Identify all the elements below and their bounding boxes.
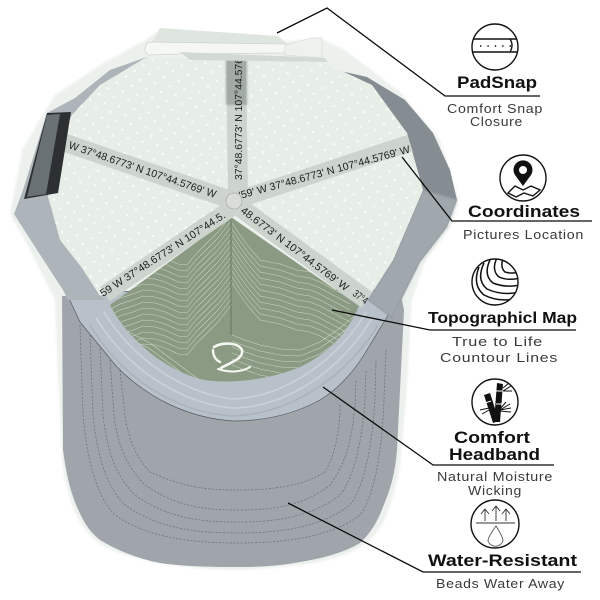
icon: map pin	[500, 155, 546, 201]
sweatband: right side	[323, 67, 457, 318]
crown panels mesh	[48, 58, 423, 298]
leader line: Comfort Headband	[323, 387, 554, 465]
heading: Topographicl Map: Topographicl Map	[428, 310, 577, 327]
icon: contour lines	[472, 258, 520, 305]
heading: Comfort Headband	[449, 429, 540, 464]
leader line: Topographic Map	[332, 310, 576, 330]
heading: PadSnap: PadSnap	[457, 73, 537, 92]
text: True to Life Countour Lines: True to Life	[452, 335, 543, 349]
centre button	[226, 193, 242, 209]
text: True to Life Countour Lines	[440, 335, 558, 365]
leader line: Coordinates	[402, 157, 592, 221]
sweatband: front	[66, 290, 395, 421]
cap illustration	[10, 28, 459, 570]
heading: Comfort Headband: Comfort	[454, 429, 531, 447]
text: Natural Moisture Wicking: Natural Moisture	[437, 470, 553, 484]
seam tapes	[60, 60, 410, 300]
text: Beads Water Away: Beads Water Away	[436, 577, 565, 591]
text: Natural Moisture Wicking: Wicking	[468, 484, 522, 498]
heading: Coordinates: Coordinates	[468, 203, 580, 221]
snap strap	[145, 28, 328, 62]
cap outer silhouette	[10, 30, 459, 570]
feature: Water-Resistant	[428, 500, 577, 591]
text: Comfort Snap Closure: Comfort Snap	[447, 102, 543, 116]
size label tag	[24, 112, 71, 199]
feature: Comfort Headband	[437, 379, 553, 498]
tape coordinate text	[67, 58, 412, 307]
feature: Topographic Map	[428, 258, 577, 365]
tape coordinate text: 37°48.6773' N 107°44.576	[233, 58, 245, 180]
dark tape shading	[226, 60, 247, 105]
icon: strap	[472, 24, 518, 70]
tape coordinate text: 48.6773' N 107°44.5769' W	[238, 205, 351, 294]
tape coordinate text: W 37°48.6773' N 107°44.5769' W	[67, 139, 218, 201]
brim stitching	[80, 325, 386, 543]
tape coordinate text: '59' W 37°48.6773' N 107°44.5769' W	[238, 144, 412, 202]
text: True to Life Countour Lines: Countour Lines	[440, 351, 558, 365]
text: Pictures Location: Pictures Location	[463, 228, 584, 242]
logo mark	[213, 344, 250, 371]
tape coordinate text: 59 W 37°48.6773' N 107°44.5.	[98, 209, 228, 300]
feature: Coordinates	[463, 155, 584, 242]
leader line: PadSnap	[277, 8, 540, 96]
icon: water drop with arrows	[471, 500, 519, 548]
green topographic panel	[110, 218, 359, 382]
text: Comfort Snap Closure: Closure	[470, 115, 523, 129]
sweatband: left side	[14, 57, 147, 300]
heading: Water-Resistant: Water-Resistant	[428, 551, 577, 570]
tape coordinate text: 37°4	[350, 288, 370, 307]
sweatband highlight rows	[90, 312, 378, 416]
text: Natural Moisture Wicking	[437, 470, 553, 498]
feature: PadSnap	[447, 24, 543, 129]
brim underside	[62, 290, 404, 567]
leader line: Water-Resistant	[288, 503, 581, 572]
text: Comfort Snap Closure	[447, 102, 543, 129]
icon: bamboo	[472, 379, 518, 425]
heading: Comfort Headband: Headband	[449, 446, 540, 464]
